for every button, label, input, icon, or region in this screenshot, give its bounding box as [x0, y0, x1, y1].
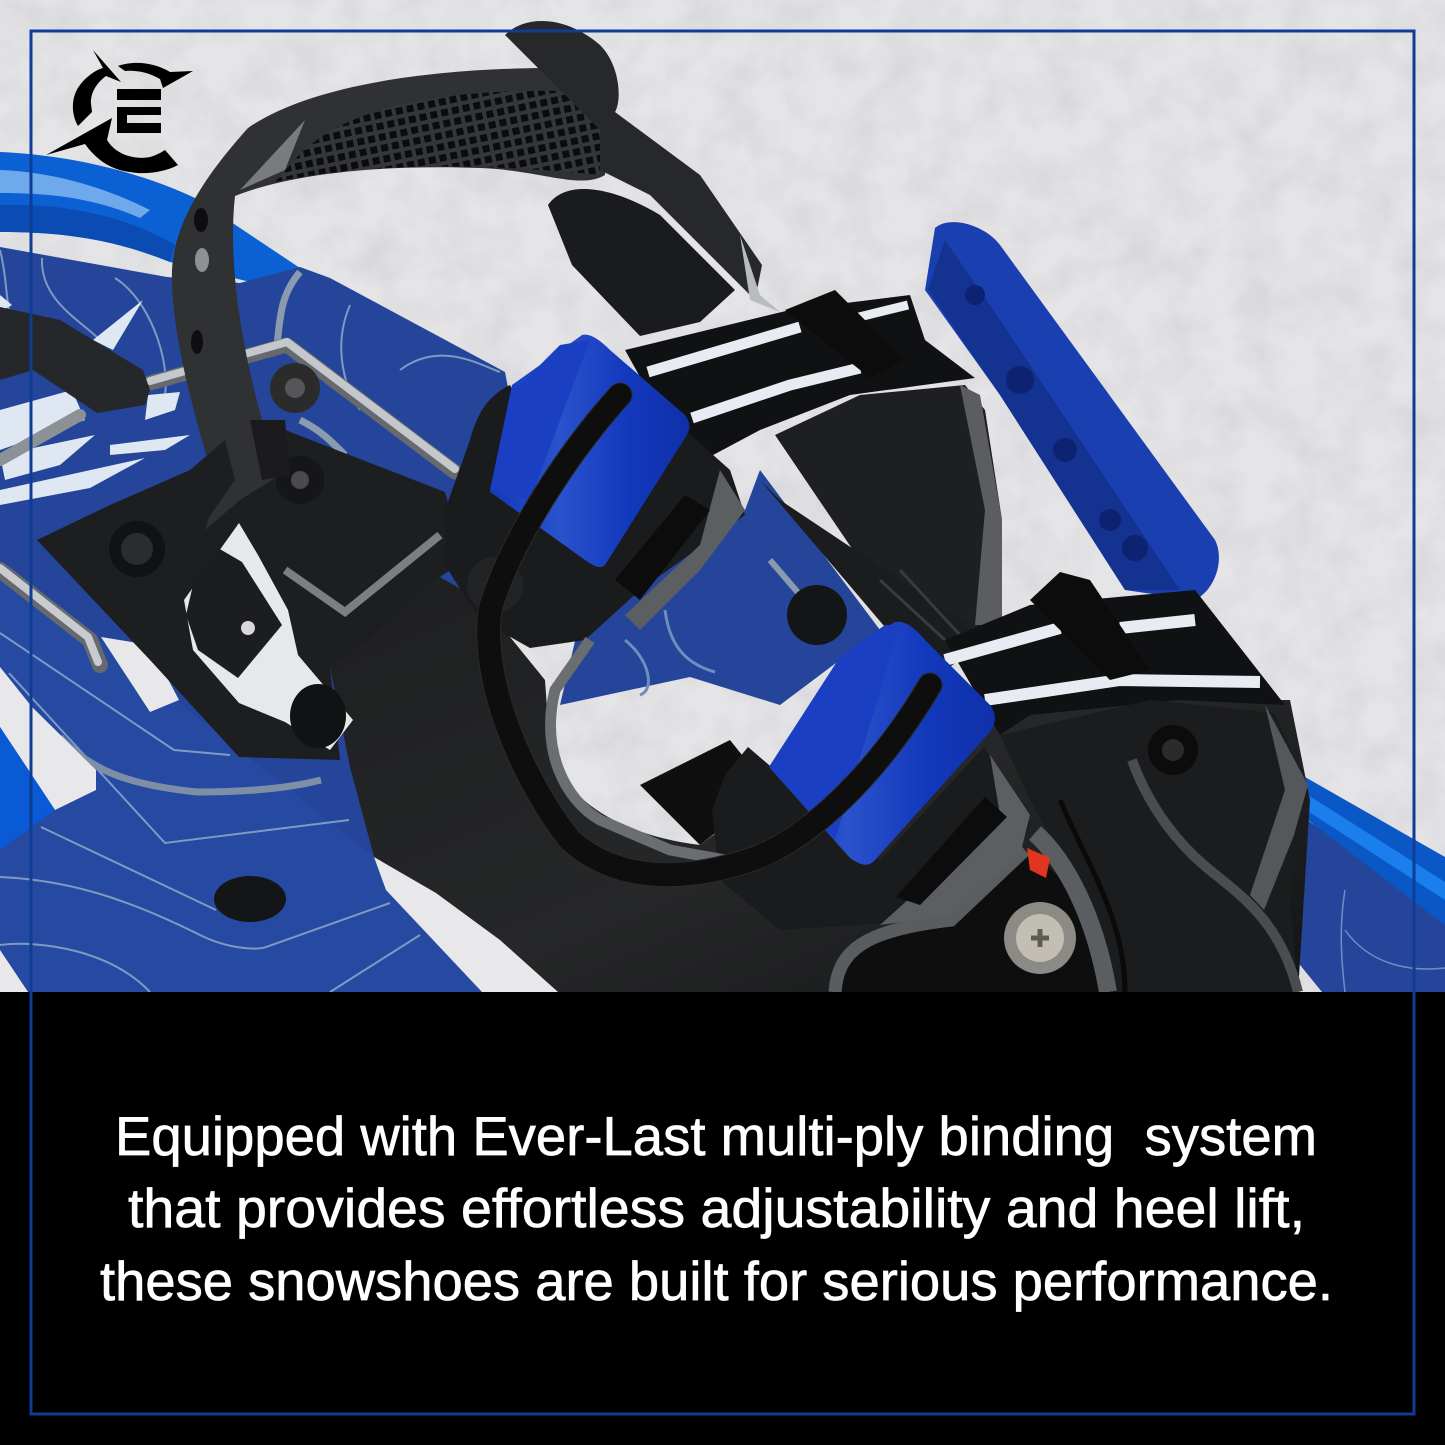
- central deck: [560, 470, 880, 705]
- braided cord: [489, 395, 930, 875]
- lower striped webbing: [945, 572, 1285, 735]
- blue heel lifter pad: [925, 222, 1219, 600]
- brand logo E: [46, 50, 193, 173]
- snow background photo area: [0, 0, 1445, 992]
- blue tube lower left: [0, 727, 55, 850]
- black caption panel: [0, 992, 1445, 1445]
- heel cup: [1000, 700, 1308, 992]
- deck rivets: [214, 585, 847, 922]
- under-binding cavity with screw: [835, 833, 1108, 992]
- right frame tube and decking: [1275, 777, 1445, 992]
- white logo graphic on deck: [0, 295, 190, 505]
- caption text: [100, 1105, 1333, 1312]
- lower buckle: [712, 747, 1030, 930]
- snow gaps in deck: [0, 637, 558, 992]
- left frame tube: [0, 152, 300, 282]
- caption line 3: these snowshoes are built for serious performance.: [100, 1250, 1333, 1312]
- gray central plate: [760, 385, 1002, 680]
- blue decking left: [0, 247, 520, 992]
- snowshoe illustration: [0, 21, 1445, 992]
- upper buckle: [445, 385, 745, 648]
- bent steel wire: [0, 342, 455, 665]
- upper striped webbing: [625, 290, 975, 462]
- caption line 1: Equipped with Ever-Last multi-ply binding system: [115, 1105, 1317, 1167]
- black toe tab: [0, 307, 150, 413]
- upper blue tab: [490, 335, 690, 567]
- grey inner opening rim: [551, 640, 725, 860]
- metal ratchet clip: [184, 523, 353, 750]
- ankle strap with perforated pad: [172, 68, 610, 530]
- leather binding body: [330, 577, 1310, 992]
- caption line 2: that provides effortless adjustability and heel lift,: [128, 1177, 1305, 1239]
- rear strap and flap: [505, 21, 780, 336]
- lower blue tab: [769, 622, 995, 865]
- front black plate: [37, 363, 465, 760]
